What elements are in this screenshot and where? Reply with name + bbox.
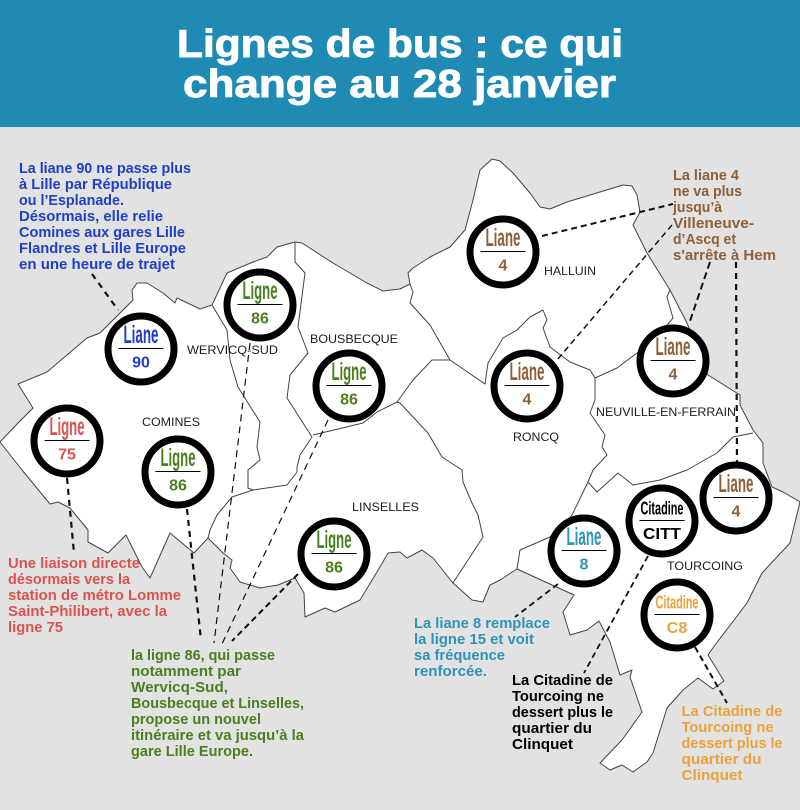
callout: ligne 86: gare Lille Europe. — [131, 743, 253, 760]
callout: liane 4 — [672, 167, 776, 264]
callout: liane 90: Comines aux gares Lille — [19, 224, 185, 241]
callout: liane 8: sa fréquence — [414, 647, 505, 664]
callout: Citadine C8: Tourcoing ne — [682, 719, 774, 736]
callout: ligne 75 — [8, 555, 181, 636]
town names: WERVICQ-SUD — [187, 343, 278, 357]
callout: Citadine CITT: Clinquet — [512, 736, 573, 753]
callout: Citadine CITT: La Citadine de — [512, 672, 613, 689]
callout: Citadine C8: Clinquet — [682, 767, 742, 784]
town names: HALLUIN — [544, 264, 596, 278]
badge: Ligne 86 Comines: 86 — [169, 478, 187, 494]
callout: Citadine C8 — [682, 703, 782, 784]
badge: Liane 4 Halluin: 4 — [499, 258, 508, 274]
badge: Citadine CITT: Citadine — [640, 498, 684, 518]
callout: liane 90: Désormais, elle relie — [19, 208, 163, 225]
town names: RONCQ — [513, 430, 559, 444]
callout: Citadine C8: dessert plus le — [682, 735, 782, 752]
badge: Liane 4 Halluin — [470, 219, 536, 285]
callout: liane 8: La liane 8 remplace — [414, 615, 550, 632]
badge: Ligne 86 Wervicq-Sud: Ligne — [242, 277, 278, 305]
badge: Citadine C8: C8 — [667, 620, 687, 637]
callout: liane 90: Flandres et Lille Europe — [19, 240, 186, 257]
title: change au 28 janvier — [183, 63, 616, 106]
callout: liane 4: jusqu’à — [672, 199, 723, 216]
badge: Liane 4 Roncq — [494, 353, 560, 419]
badge: Ligne 86 Wervicq-Sud — [227, 272, 293, 338]
callout: liane 90: La liane 90 ne passe plus — [19, 160, 191, 177]
badge: Liane 4 Tourcoing — [703, 465, 769, 531]
callout: Citadine CITT — [512, 672, 613, 753]
callout: liane 8: renforcée. — [414, 663, 487, 680]
callout: liane 4: d’Ascq et — [673, 231, 736, 248]
badge: Ligne 86 Linselles: 86 — [325, 560, 343, 576]
badge: Liane 8: 8 — [580, 556, 589, 574]
map of communes — [0, 159, 800, 772]
town names: COMINES — [142, 415, 200, 429]
title — [177, 23, 623, 106]
callout: Citadine CITT: quartier du — [512, 720, 592, 737]
callout: ligne 75: Une liaison directe — [8, 555, 140, 572]
header banner — [0, 0, 800, 127]
badge: Liane 4 Tourcoing: 4 — [732, 504, 741, 520]
badge: Liane 90: Liane — [124, 321, 159, 349]
callout: liane 4: ne va plus — [673, 183, 742, 200]
title: Lignes de bus : ce qui — [177, 23, 623, 66]
callout: ligne 86: la ligne 86, qui passe — [131, 647, 275, 664]
badge: Liane 4 Roncq: Liane — [510, 358, 545, 386]
badge: Liane 4 Roncq: 4 — [523, 392, 532, 408]
badge: Citadine CITT — [629, 488, 695, 554]
callout: liane 90: ou l’Esplanade. — [19, 192, 124, 209]
callout: liane 4: Villeneuve- — [673, 215, 754, 232]
badge: Ligne 86 Linselles — [301, 521, 367, 587]
callout: liane 90: à Lille par République — [19, 176, 172, 193]
badge: Ligne 86 Bousbecque: 86 — [340, 392, 358, 408]
badge: Ligne 86 Bousbecque — [316, 353, 382, 419]
callout: liane 8: la ligne 15 et voit — [414, 631, 534, 648]
callout: liane 8 — [414, 615, 550, 680]
badge: Liane 8: Liane — [566, 523, 602, 551]
callout: Citadine C8: La Citadine de — [682, 703, 782, 720]
callout: Citadine C8: quartier du — [682, 751, 762, 768]
callout: ligne 86 — [131, 647, 305, 760]
town names: NEUVILLE-EN-FERRAIN — [596, 405, 736, 419]
callout: Citadine CITT: Tourcoing ne — [512, 688, 604, 705]
callout: ligne 86: itinéraire et va jusqu’à la — [131, 727, 305, 744]
callout: ligne 75: ligne 75 — [8, 619, 63, 636]
badge: Liane 4 Neuville-en-Ferrain — [640, 328, 706, 394]
callout: ligne 75: station de métro Lomme — [8, 587, 181, 604]
badge: Liane 4 Tourcoing: Liane — [718, 470, 754, 498]
badge: Liane 4 Halluin: Liane — [486, 224, 521, 252]
town names: BOUSBECQUE — [310, 332, 398, 346]
callout: Citadine CITT: dessert plus le — [512, 704, 613, 721]
badge: Ligne 86 Wervicq-Sud: 86 — [251, 310, 269, 328]
callout: ligne 86: propose un nouvel — [131, 711, 261, 728]
badge: Liane 4 Neuville-en-Ferrain: Liane — [656, 333, 691, 361]
callout: ligne 75: désormais vers la — [8, 571, 131, 588]
badge: Ligne 75: Ligne — [50, 413, 85, 441]
badge: Citadine C8: Citadine — [655, 592, 699, 612]
callout: liane 4: La liane 4 — [673, 167, 740, 184]
badge: Ligne 86 Comines — [145, 439, 211, 505]
town names — [142, 264, 743, 573]
badge: Liane 90: 90 — [132, 354, 150, 372]
badge: Liane 90 — [108, 316, 174, 382]
callout: liane 90: en une heure de trajet — [19, 256, 175, 273]
town names: TOURCOING — [667, 559, 743, 573]
badge: Ligne 75 — [34, 408, 100, 474]
badge: Liane 4 Neuville-en-Ferrain: 4 — [669, 366, 678, 384]
callout: ligne 86: Bousbecque et Linselles, — [131, 695, 304, 712]
callout: ligne 86: Wervicq-Sud, — [131, 679, 228, 696]
badge: Ligne 75: 75 — [58, 446, 76, 464]
callout: liane 90 — [19, 160, 191, 273]
badge: Citadine C8 — [644, 582, 710, 648]
badge: Ligne 86 Bousbecque: Ligne — [332, 358, 367, 386]
callout: ligne 75: Saint-Philibert, avec la — [8, 603, 168, 620]
town names: LINSELLES — [352, 500, 419, 514]
callout: liane 4: s'arrête à Hem — [673, 247, 776, 264]
dashed leader lines — [67, 204, 737, 703]
badge: Liane 8 — [551, 518, 617, 584]
callout: ligne 86: notamment par — [131, 663, 241, 680]
badge: Ligne 86 Linselles: Ligne — [316, 526, 352, 554]
badge: Ligne 86 Comines: Ligne — [160, 444, 196, 472]
badge: Citadine CITT: CITT — [643, 526, 681, 543]
